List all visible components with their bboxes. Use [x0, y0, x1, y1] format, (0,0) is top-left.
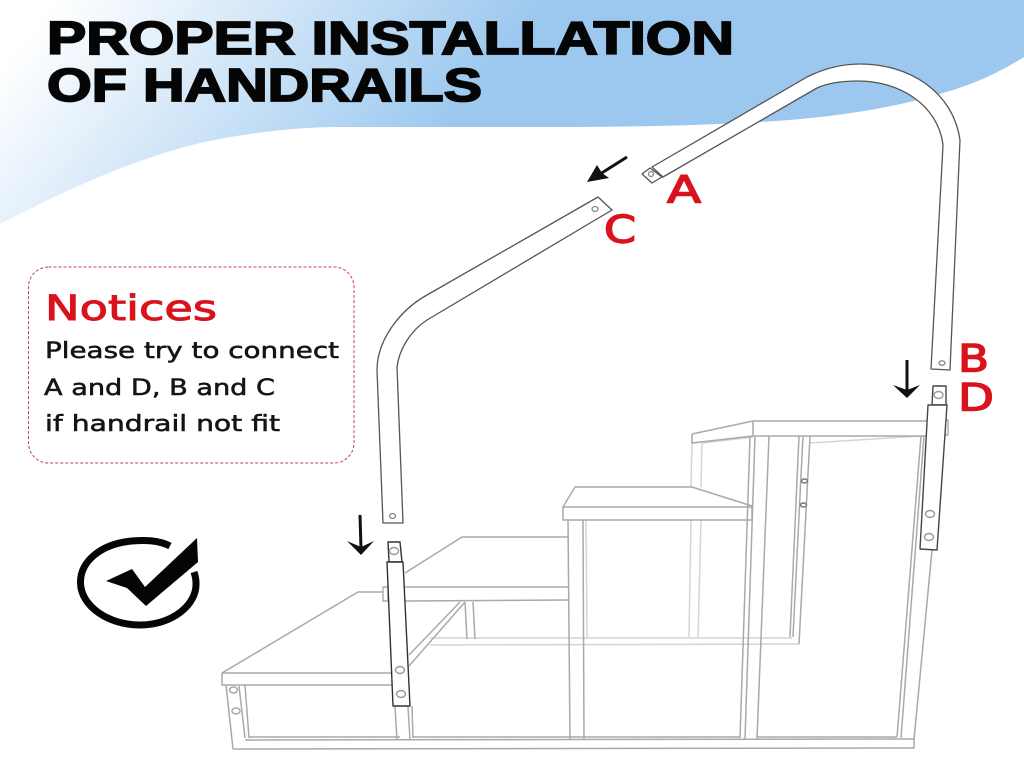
notices text [44, 338, 339, 437]
faint rear frame [430, 436, 922, 645]
title [47, 12, 734, 111]
labels A B C D: D [958, 376, 994, 420]
title: PROPER INSTALLATION [47, 12, 734, 64]
handrail: A to B [642, 64, 960, 370]
labels A B C D: B [958, 338, 989, 380]
handrail: C [377, 197, 612, 523]
labels A B C D [604, 168, 994, 420]
icon: check mark in circle [80, 538, 198, 625]
notices text: A and D, B and C [44, 375, 275, 401]
labels A B C D: A [667, 168, 701, 212]
panel: notices [28, 267, 354, 463]
base [233, 739, 914, 749]
arrow: diagonal [587, 157, 627, 182]
arrow: down left [347, 515, 374, 555]
arrow: down right [893, 360, 920, 398]
title: OF HANDRAILS [47, 59, 482, 111]
step 4 [692, 421, 928, 434]
notices heading: Notices [45, 289, 217, 329]
step 1 [222, 592, 383, 673]
notices text: if handrail not fit [45, 411, 280, 437]
step 3 [563, 487, 752, 507]
step 2 [405, 537, 568, 573]
left bracket [383, 542, 410, 706]
stairs [222, 421, 932, 749]
blue header background [0, 0, 1024, 224]
labels A B C D: C [604, 208, 636, 252]
notices text: Please try to connect [45, 338, 339, 364]
right bracket [920, 386, 948, 550]
